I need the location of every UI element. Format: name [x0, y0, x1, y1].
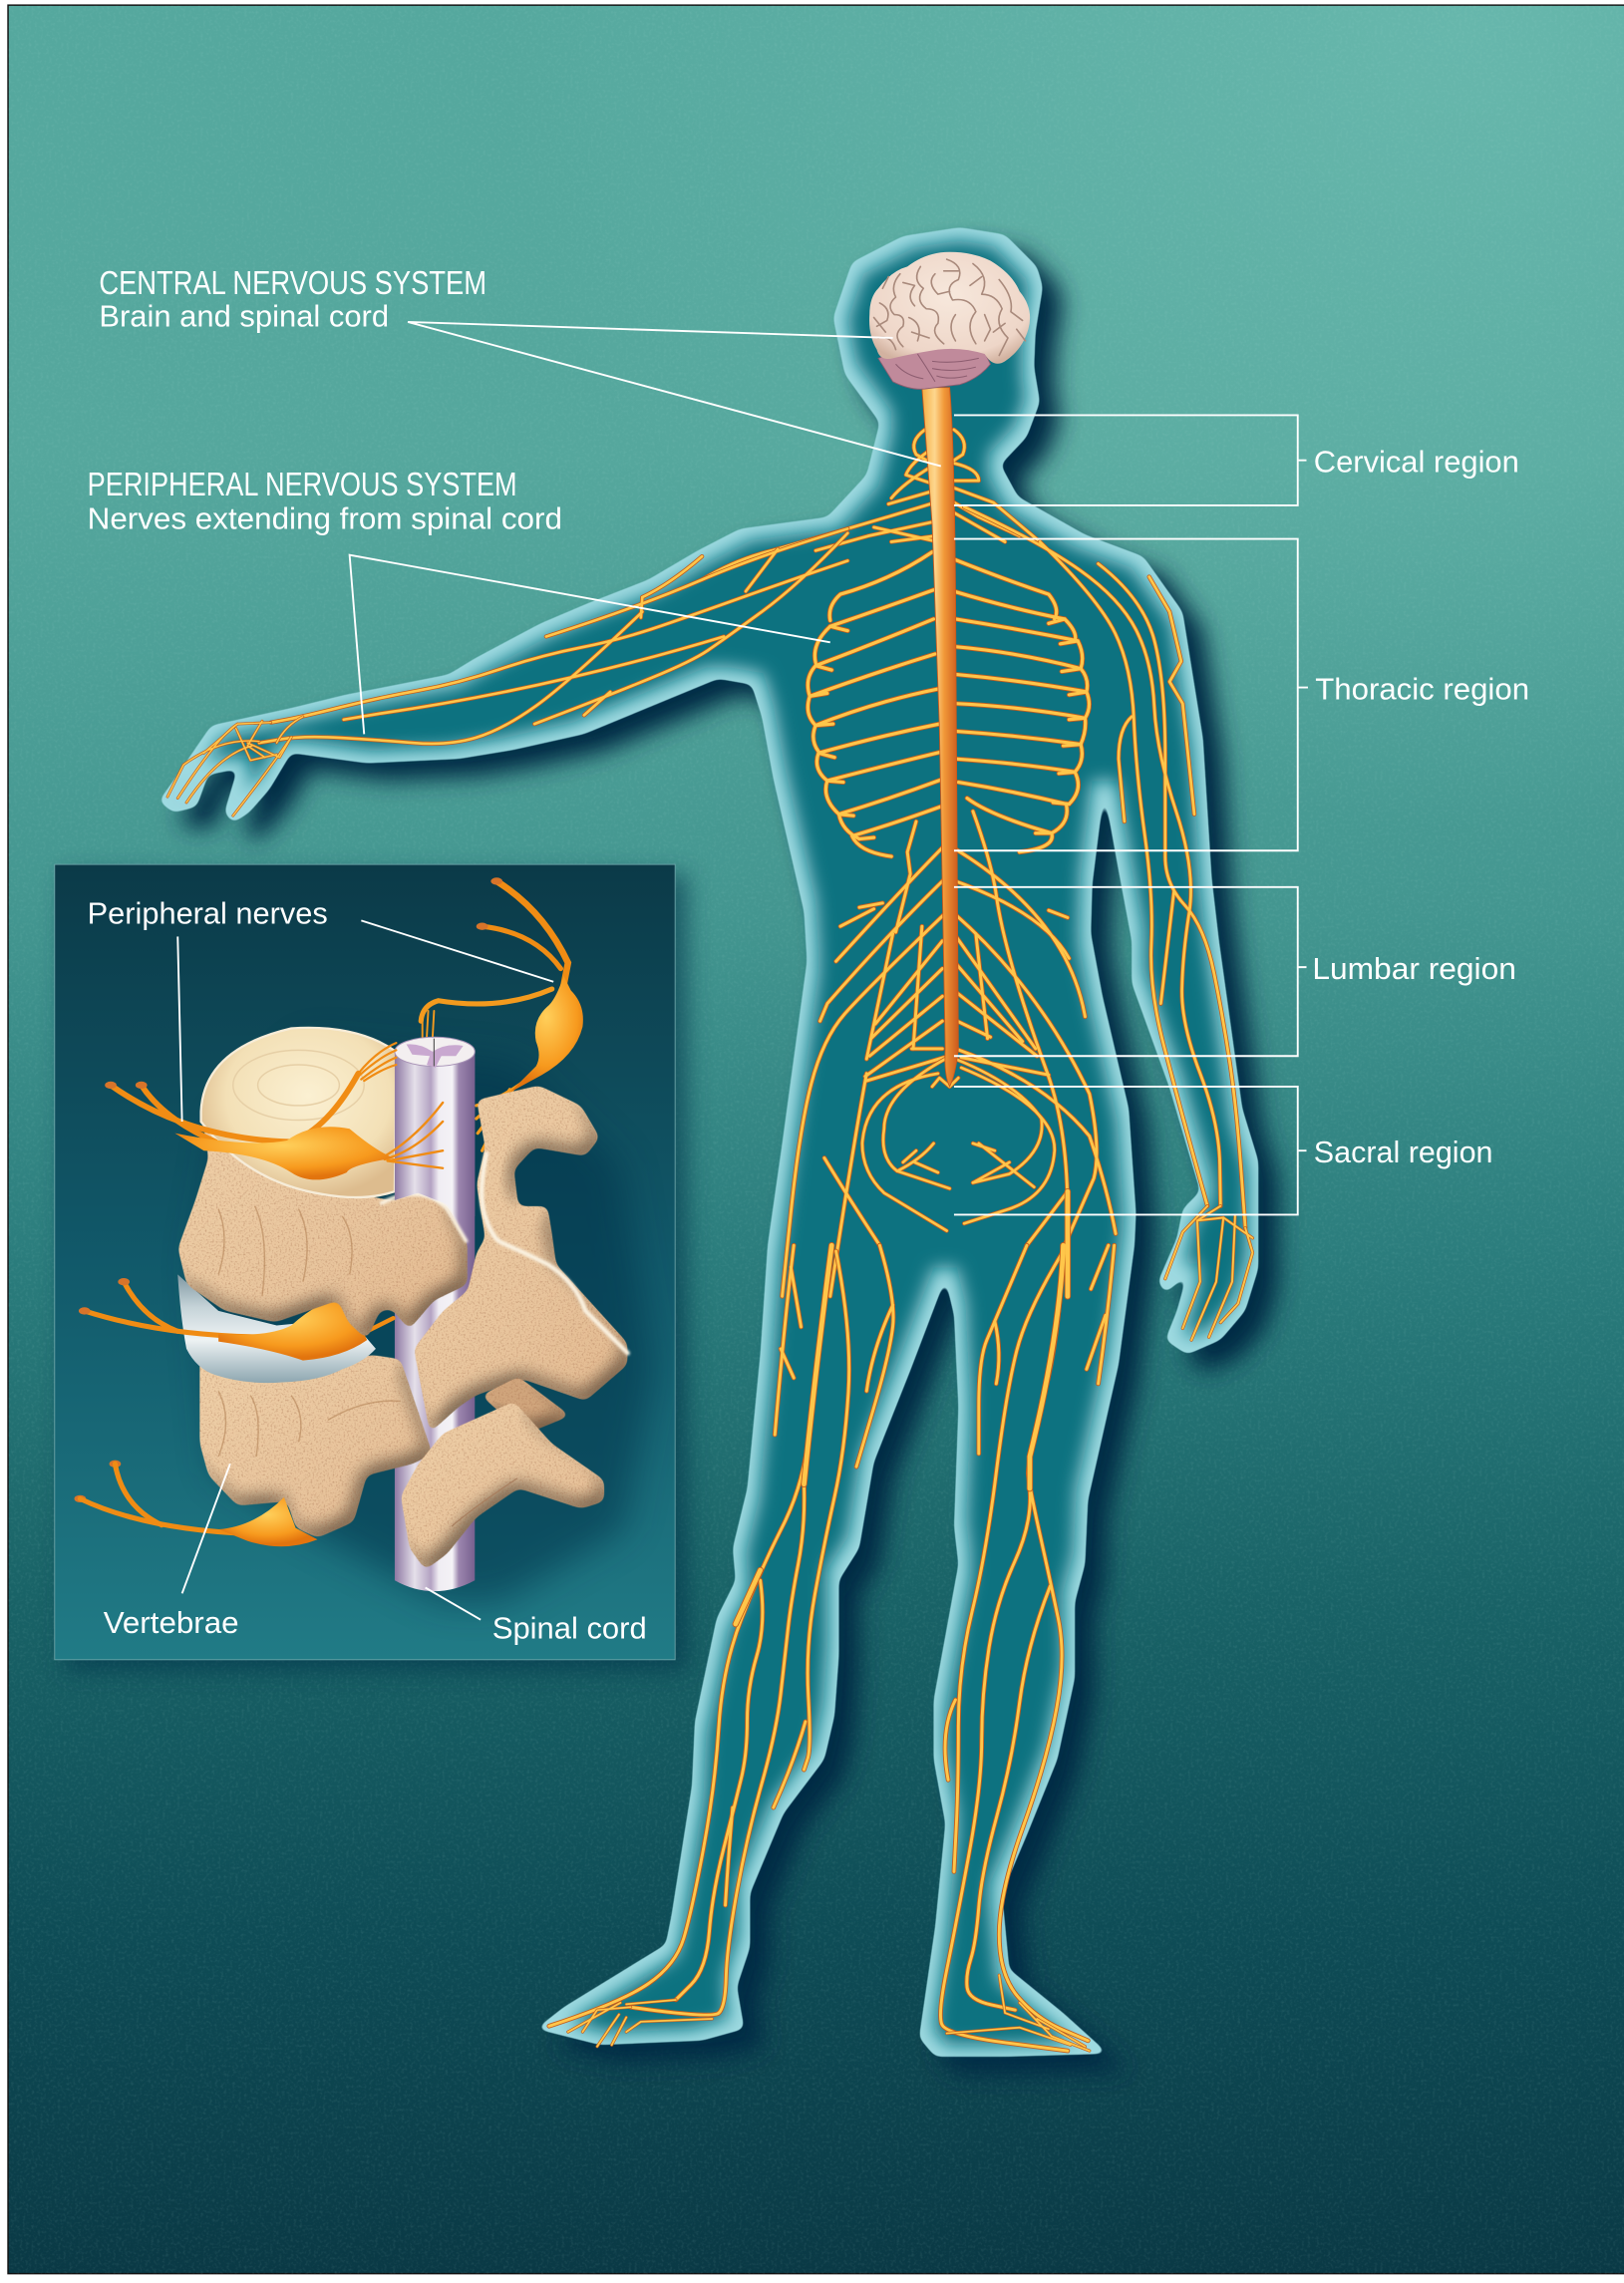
leader lines: [350, 555, 830, 734]
upper body striations: [218, 1206, 352, 1296]
inset background: [55, 864, 675, 1660]
nerves: sacral loops: [862, 1059, 1055, 1231]
lower vertebra striations: [218, 1391, 401, 1457]
upper-right nerve: [483, 881, 568, 1001]
illustration shadow: [198, 1043, 654, 1602]
icon: brain: [869, 252, 1030, 389]
bracket: sacral region: Sacral region: [1314, 1135, 1493, 1169]
upper vertebra body: [177, 1112, 468, 1340]
heading: peripheral nervous system: Nerves extending from spinal cord: [88, 500, 562, 535]
cerebrum: [869, 252, 1030, 364]
spinal cord segment: [395, 1050, 475, 1591]
bracket: lumbar region: Lumbar region: [1312, 951, 1516, 986]
ganglion: low: [218, 1497, 317, 1546]
callout: central nervous system: [99, 264, 941, 467]
spinal cord: [922, 388, 958, 1087]
nerve stubs: [75, 877, 502, 1502]
bracket: thoracic region: Thoracic region: [1315, 671, 1529, 706]
heading: peripheral nervous system: PERIPHERAL NERVOUS SYSTEM: [88, 466, 517, 502]
process highlight: [482, 1153, 628, 1353]
ganglion: upper right: [509, 976, 583, 1093]
label: vertebrae: Vertebrae: [104, 1605, 239, 1640]
mid nerve: [85, 1282, 393, 1337]
nerves: left leg: [549, 1245, 893, 2026]
nerves: thick thigh trunks: [736, 1191, 1068, 1624]
central slit: [433, 1039, 435, 1066]
nerves: lumbar: [783, 812, 1116, 1296]
label: peripheral nerves: [88, 895, 553, 1122]
nerves: lowered hand: [1165, 1206, 1252, 1340]
nerves: feet: [568, 1975, 1090, 2051]
low nerve: [80, 1464, 249, 1533]
heading: peripheral nervous system: [88, 466, 562, 535]
body teal interior: [159, 227, 1258, 2057]
ganglion: upper left: [174, 1127, 393, 1179]
nerves behind vertebrae: [421, 989, 552, 1150]
upper vertebra process: [414, 1085, 628, 1434]
grey matter: [407, 1044, 464, 1068]
upper-left nerve: [111, 1043, 443, 1168]
vertebral disc top: [201, 1028, 396, 1197]
nerves: lowered arm: [964, 506, 1245, 1228]
label: spinal cord: Spinal cord: [492, 1611, 647, 1646]
inset shadow: [64, 874, 688, 1671]
cerebellum folds: [896, 354, 979, 382]
heading: central nervous system: CENTRAL NERVOUS SYSTEM: [99, 264, 487, 301]
nerves: extended arm: [259, 528, 847, 744]
vertebra rim highlight: [382, 1194, 467, 1241]
lower vertebra body: [199, 1355, 433, 1538]
bracket: sacral region: [954, 1087, 1493, 1214]
bracket: lumbar region: [954, 887, 1516, 1056]
bracket: thoracic region: [954, 539, 1529, 850]
brain folds: [874, 259, 1026, 356]
intervertebral disc: [177, 1274, 376, 1383]
body silhouette: [159, 227, 1279, 2074]
nerve rootlets right: [477, 1074, 534, 1150]
label: vertebrae: [104, 1464, 239, 1640]
nerves: rib pairs: [808, 552, 1089, 856]
body drop shadow: [179, 244, 1279, 2074]
heading: central nervous system: Brain and spinal cord: [99, 298, 389, 333]
artist signature: [452, 1478, 517, 1526]
leader lines: [408, 322, 941, 467]
small rear spur: [481, 1377, 571, 1435]
cerebellum: [878, 347, 990, 389]
nerves: right leg: [940, 1245, 1115, 2051]
cord top cap: [395, 1037, 475, 1066]
label: peripheral nerves: Peripheral nerves: [88, 895, 328, 930]
nerves: extended hand: [167, 717, 303, 815]
heading: central nervous system: [99, 264, 487, 333]
cord over disc: [395, 1052, 475, 1216]
callout: peripheral nervous system: [88, 466, 830, 734]
label: spinal cord: [426, 1588, 647, 1646]
lower process: [401, 1401, 604, 1570]
body light halo: [159, 227, 1258, 2057]
bracket: cervical region: [954, 415, 1519, 505]
bracket: cervical region: Cervical region: [1314, 444, 1519, 479]
upper right nerve branch: [421, 989, 552, 1021]
nerves: neck plexus: [702, 430, 1040, 579]
ganglion: mid: [218, 1296, 367, 1361]
peripheral nerves: [167, 430, 1252, 2051]
disc rings: [233, 1050, 364, 1121]
panel: spine detail inset: [55, 864, 688, 1671]
